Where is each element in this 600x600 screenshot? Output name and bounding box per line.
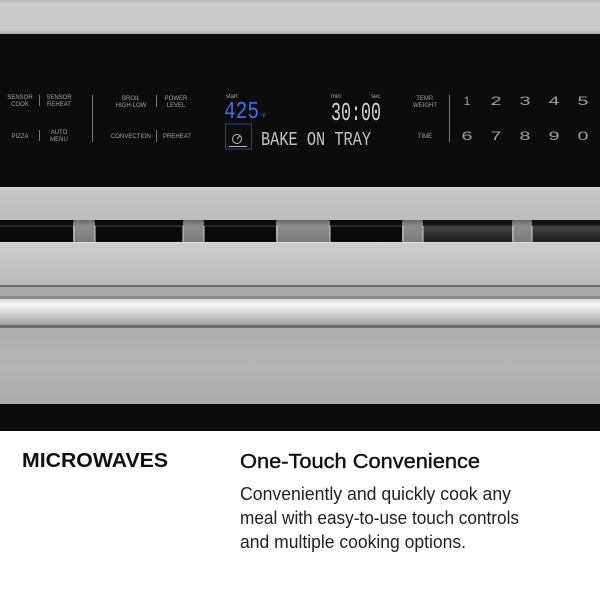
button labels: broil and power group: HIGH-LOW (116, 103, 147, 109)
vent row (0, 220, 600, 243)
lower door panel (0, 328, 600, 404)
button labels: broil and power group: POWER (165, 96, 188, 102)
body copy: and multiple cooking options. (240, 532, 466, 552)
keypad: digits: 3 (520, 94, 531, 108)
keypad: digits: 2 (490, 94, 502, 108)
button labels: broil and power group (111, 95, 191, 142)
keypad: digits: 5 (578, 94, 589, 108)
keypad: digits: 6 (462, 129, 473, 143)
keypad: digits: 8 (520, 129, 531, 143)
heading: microwaves: MICROWAVES (22, 450, 168, 472)
display: timer readout: min (331, 94, 341, 100)
button labels: broil and power group: BROIL (122, 96, 141, 102)
display: timer readout: sec (371, 94, 380, 100)
display: timer readout: 30:00 (331, 98, 381, 128)
door handle (0, 285, 600, 328)
display: timer readout (331, 94, 381, 128)
button labels: sensor and pizza group: REHEAT (47, 102, 71, 108)
button labels: sensor and pizza group: PIZZA (11, 134, 29, 140)
body copy: Conveniently and quickly cook any (240, 484, 511, 504)
steel door panel (0, 243, 600, 287)
steel strip above vents (0, 187, 600, 220)
keypad: digits: 9 (548, 129, 560, 143)
button labels: sensor and pizza group: MENU (50, 137, 68, 143)
body copy (240, 484, 519, 552)
button labels: broil and power group: LEVEL (167, 103, 186, 109)
button labels: broil and power group: PREHEAT (163, 134, 191, 140)
button labels: sensor and pizza group: SENSOR (7, 95, 33, 101)
button labels: temp and time: WEIGHT (413, 103, 437, 109)
keypad: digits: 4 (548, 94, 560, 108)
button labels: temp and time: TIME (418, 134, 432, 140)
button labels: sensor and pizza group: AUTO (51, 130, 68, 136)
subheading: One-Touch Convenience (240, 451, 480, 473)
text panel (0, 431, 600, 600)
display: temperature readout: 425 (224, 99, 259, 126)
display: mode message: BAKE ON TRAY (261, 129, 371, 151)
panel: black control panel (0, 34, 600, 187)
icon: bake on tray mode (226, 124, 252, 149)
keypad: digits (462, 94, 589, 143)
button labels: sensor and pizza group: SENSOR (46, 95, 72, 101)
display: temperature readout: start (226, 94, 238, 100)
button labels: broil and power group: CONVECTION (111, 134, 151, 140)
top steel trim (0, 0, 600, 34)
button labels: temp and time (413, 95, 450, 142)
button labels: sensor and pizza group: COOK (11, 102, 29, 108)
body copy: meal with easy-to-use touch controls (240, 508, 519, 528)
display: temperature readout: °F (260, 114, 266, 120)
keypad: digits: 7 (490, 129, 502, 143)
button labels: temp and time: TEMP. (416, 96, 434, 102)
button labels: sensor and pizza group (7, 95, 93, 143)
black lower band (0, 404, 600, 431)
keypad: digits: 0 (578, 129, 589, 143)
keypad: digits: 1 (464, 94, 471, 108)
